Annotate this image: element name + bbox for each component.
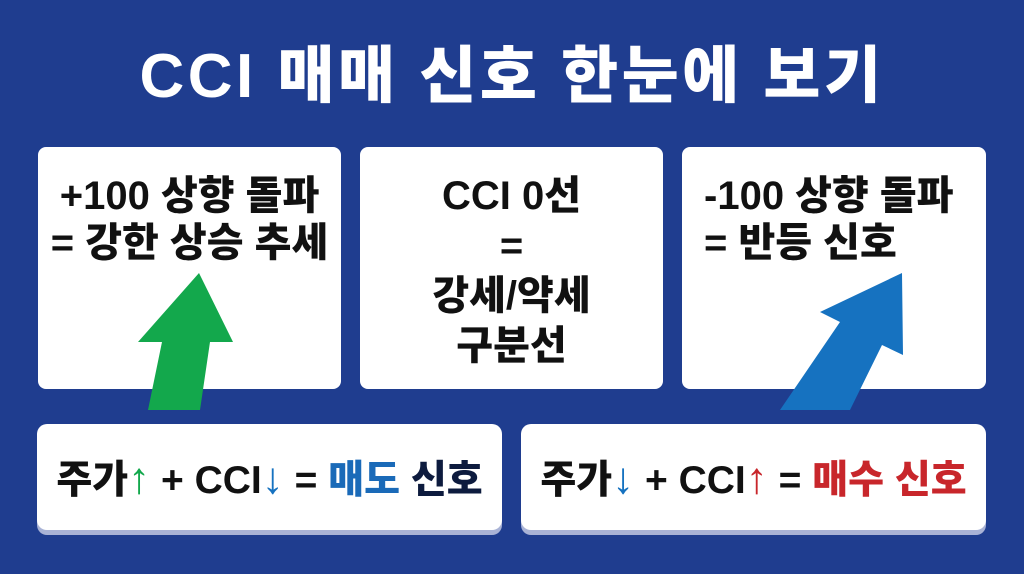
text: +100: = 강한 상승 추세 (51, 221, 328, 265)
text: 0 line: = (500, 224, 523, 268)
text: -100 (704, 174, 954, 265)
title: CCI 매매 신호 한눈에 보기 (139, 42, 885, 111)
icon: blue arrow (780, 273, 903, 410)
icon: green arrow (138, 273, 233, 410)
panel: -100 (682, 147, 986, 389)
text: +100 (51, 174, 328, 265)
panel: buy signal (521, 424, 986, 530)
panel: +100 (38, 147, 341, 389)
text: 0 line: 구분선 (456, 324, 567, 368)
panel: CCI 0 (360, 147, 663, 389)
text: 0 line: 강세/약세 (432, 274, 591, 318)
text: +100: +100 상향 돌파 (60, 174, 319, 218)
panel: sell signal: 주가↑ + CCI↓ = 매도 신호 (56, 454, 483, 503)
text: -100: -100 상향 돌파 (704, 174, 954, 218)
text: 0 line: CCI 0선 (442, 174, 581, 218)
text: 0 line (432, 174, 591, 368)
text: -100: = 반등 신호 (704, 221, 897, 265)
panel: sell signal (37, 424, 502, 530)
panel: buy signal: 주가↓ + CCI↑ = 매수 신호 (540, 454, 967, 503)
